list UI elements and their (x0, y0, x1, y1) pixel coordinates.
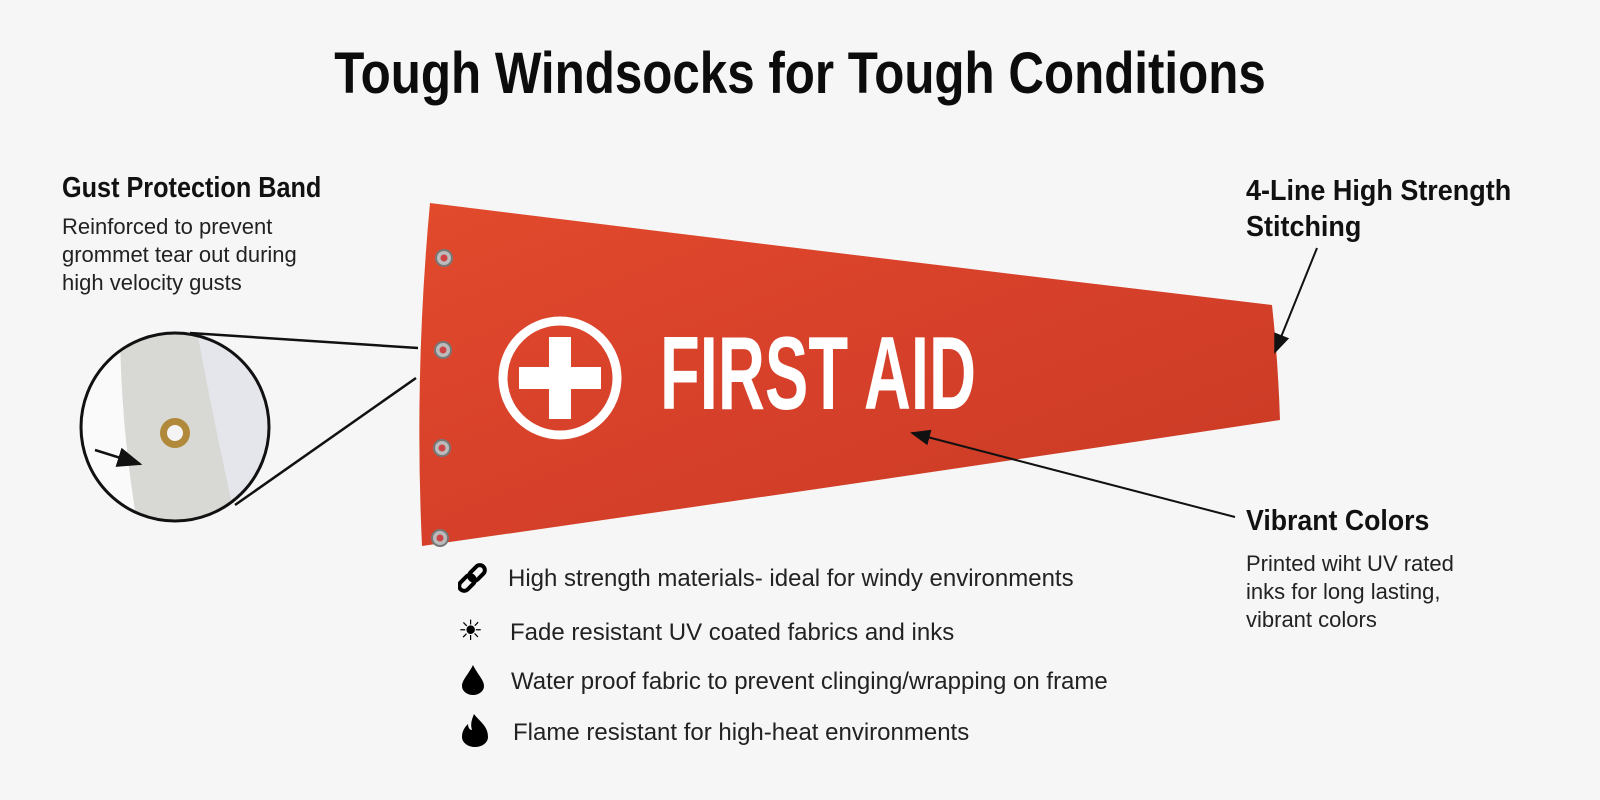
title: Tough Windsocks for Tough Conditions (334, 41, 1266, 106)
callout: gust protection band: Reinforced to prevent grommet tear out during high velocity gusts (62, 214, 297, 295)
callout: gust protection band (62, 172, 321, 295)
first aid logo (503, 321, 617, 435)
windsock body: FIRST AID (660, 316, 976, 432)
callout: vibrant colors: Printed wiht UV rated inks for long lasting, vibrant colors (1246, 551, 1454, 632)
feature: flame resistant: Flame resistant for high-heat environments (513, 719, 969, 746)
arrow: vibrant colors (912, 433, 1235, 517)
callout: vibrant colors (1246, 505, 1454, 632)
feature: high strength: High strength materials- ideal for windy environments (508, 565, 1074, 592)
callout: stitching: 4-Line High Strength (1246, 175, 1511, 207)
callout: gust protection band: Gust Protection Band (62, 172, 321, 204)
feature: fade resistant: Fade resistant UV coated fabrics and inks (510, 619, 954, 646)
callout: vibrant colors: Vibrant Colors (1246, 505, 1429, 537)
arrow: stitching (1275, 248, 1317, 352)
illustration: windsock with callouts (80, 203, 1318, 547)
feature: fade resistant: ☀ (458, 615, 483, 646)
windsock body (419, 203, 1280, 546)
feature list (458, 563, 1108, 747)
feature: water proof: Water proof fabric to prevent clinging/wrapping on frame (511, 668, 1108, 695)
callout: stitching (1246, 175, 1511, 243)
callout: stitching: Stitching (1246, 211, 1361, 243)
zoom circle detail (80, 332, 418, 522)
grommets (432, 250, 452, 546)
